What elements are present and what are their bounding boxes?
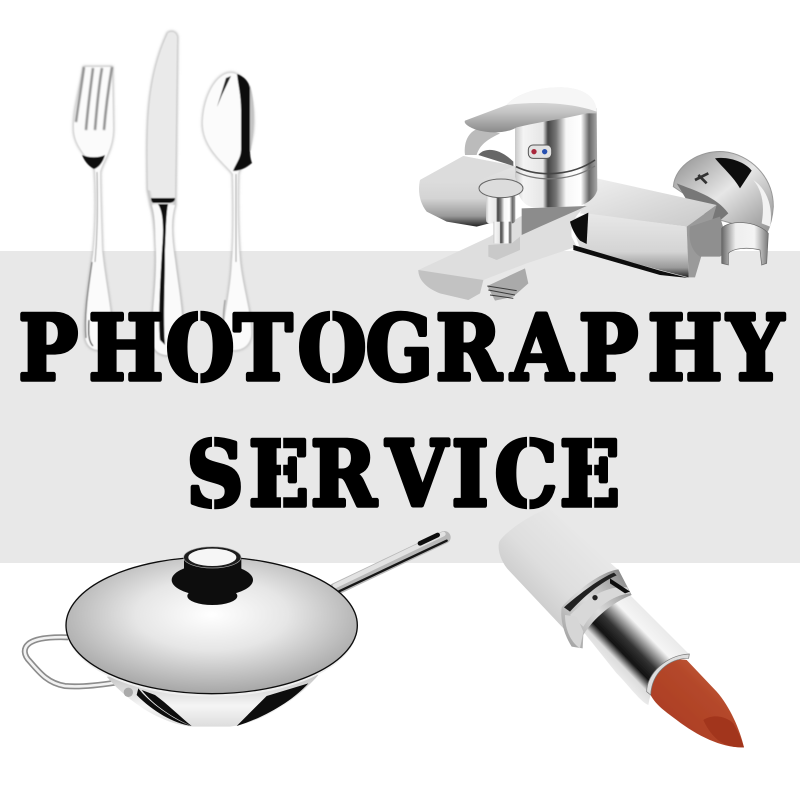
lipstick cap [499,509,618,630]
faucet spout [418,206,689,300]
faucet wall bracket [673,152,773,233]
faucet threaded nut [487,268,528,301]
title line one: PHOTOGRAPHY [19,295,785,401]
lipstick bullet [647,654,744,747]
wok side handle [25,637,115,686]
title line two: SERVICE [187,421,620,527]
faucet right body [570,178,717,277]
faucet back body [419,156,515,227]
wok lid [66,557,357,697]
faucet shower holder [689,217,768,265]
icon: fork [74,67,113,350]
wok bowl [107,675,318,727]
icon: wok with lid [25,534,447,727]
lipstick collar [561,569,632,648]
background band [0,251,800,563]
stencil cuts [212,434,594,511]
wok lid knob [172,547,253,605]
wok long handle [335,534,447,592]
lipstick tube [583,595,690,705]
icon: knife [148,32,183,355]
icon: lipstick [499,509,744,747]
icon: cutlery set [74,32,254,355]
icon: chrome faucet [418,87,773,301]
faucet cylinder and lever [465,87,597,207]
faucet plunger knob [479,179,523,260]
stencil cuts [192,310,338,386]
icon: spoon [203,73,254,350]
